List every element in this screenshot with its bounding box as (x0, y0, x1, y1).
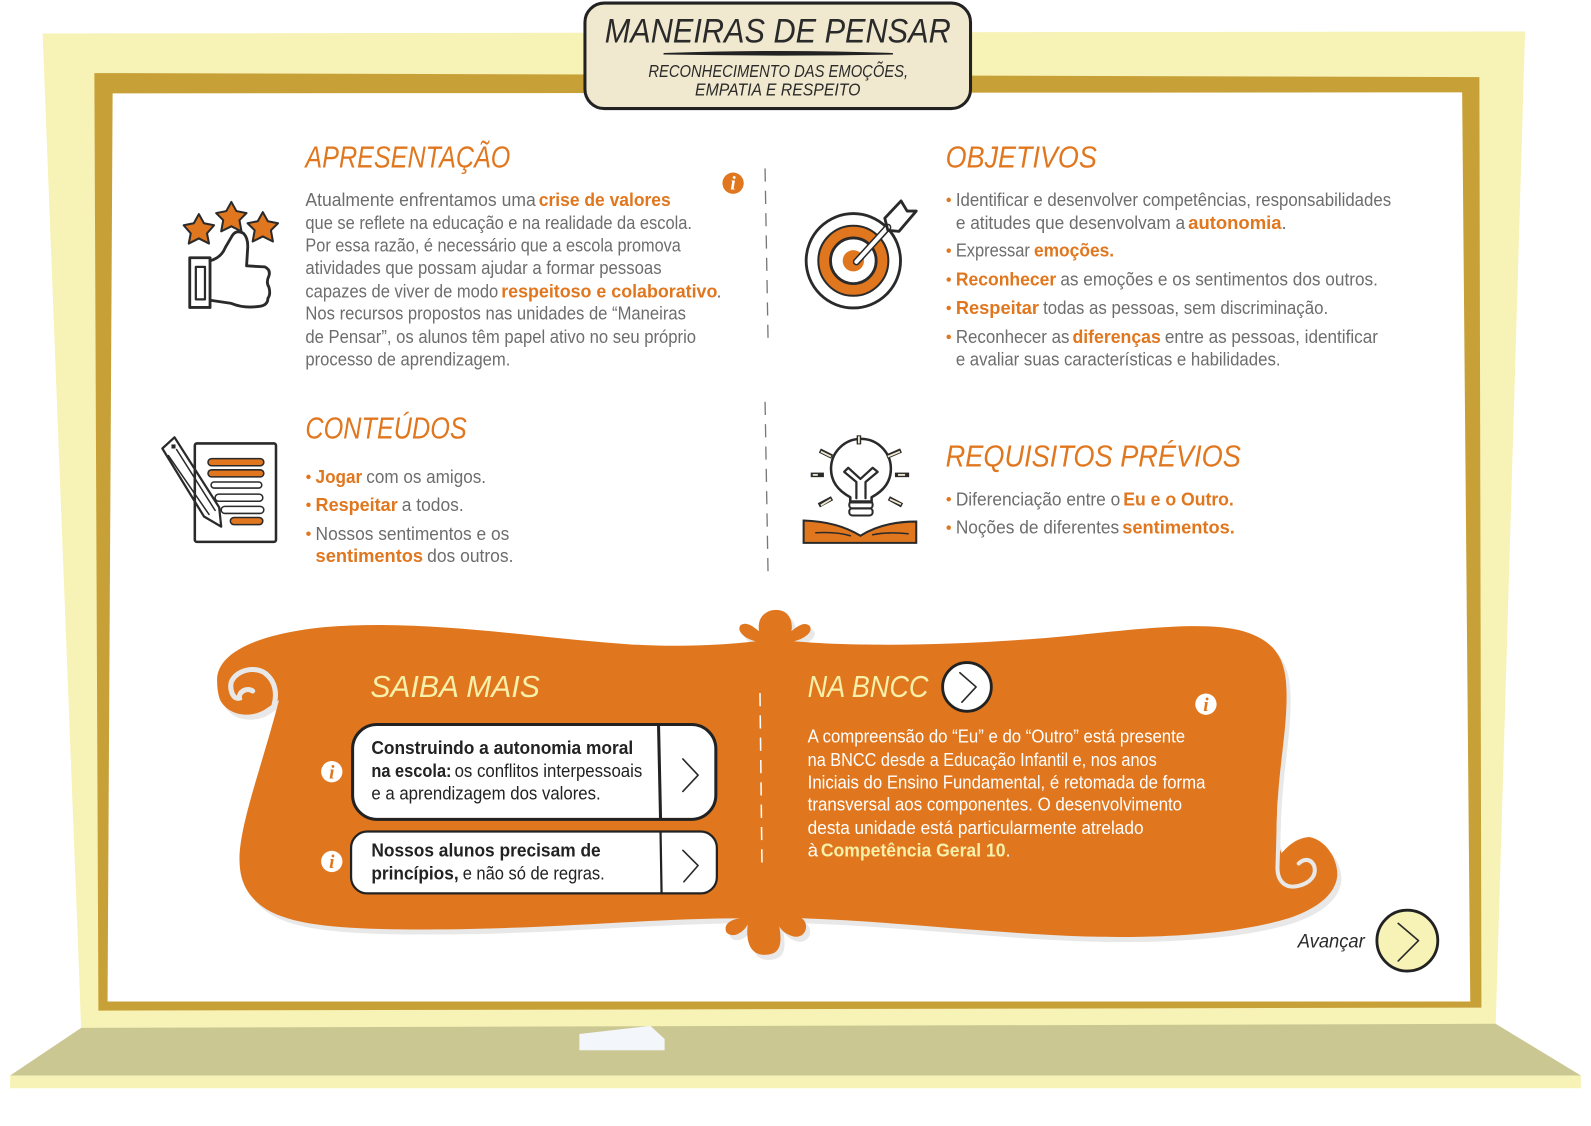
board: white writing surface (108, 92, 1470, 1001)
list: conteúdos: com os amigos. (366, 466, 486, 487)
icon: thumbs up with stars (184, 202, 278, 307)
list: objetivos: autonomia (1188, 212, 1282, 233)
title: MANEIRAS DE PENSAR (605, 13, 951, 51)
heading: apresentação: APRESENTAÇÃO (304, 139, 510, 174)
left spiral (231, 670, 275, 705)
text block: na bncc: à (808, 839, 819, 860)
list: objetivos: Reconhecer (956, 269, 1057, 290)
list: requisitos: Noções de diferentes (956, 517, 1119, 538)
list: objetivos: todas as pessoas, sem discriminação. (1043, 297, 1328, 318)
text block: apresentação: capazes de viver de modo (305, 280, 498, 301)
icon: target with arrow (806, 201, 916, 308)
card: alunos e princípios: e não só de regras. (463, 863, 605, 884)
text block: apresentação: . (716, 280, 722, 301)
card: alunos e princípios: Nossos alunos precisam de (371, 839, 601, 860)
text block: apresentação: Atualmente enfrentamos uma (305, 189, 536, 210)
list: objetivos: emoções. (1034, 240, 1114, 261)
icon: info orange: i (730, 174, 736, 195)
list: objetivos: diferenças (1073, 326, 1161, 347)
list: objetivos: e atitudes que desenvolvam a (956, 212, 1186, 233)
text block: na bncc: transversal aos componentes. O desenvolvimento (808, 794, 1182, 815)
list: objetivos: as emoções e os sentimentos dos outros. (1060, 269, 1378, 290)
text block: na bncc: na BNCC desde a Educação Infantil e, nos anos (808, 749, 1157, 770)
list: requisitos: sentimentos. (1122, 517, 1235, 538)
icon: light bulb over open book (804, 435, 916, 543)
text block: apresentação: de Pensar”, os alunos têm papel ativo no seu próprio (305, 326, 696, 347)
card: autonomia moral: Construindo a autonomia moral (371, 737, 633, 758)
heading: saiba mais: SAIBA MAIS (370, 670, 540, 704)
list: requisitos (946, 488, 1235, 538)
list: conteúdos: a todos. (402, 494, 464, 515)
chalk eraser (579, 1026, 665, 1050)
text block: na bncc: A compreensão do “Eu” e do “Outro” está presente (808, 726, 1185, 747)
subtitle (648, 61, 908, 99)
list: objetivos: Identificar e desenvolver competências, responsabilidades (956, 189, 1391, 210)
board: tray front edge (10, 1076, 1581, 1088)
title plaque (585, 3, 971, 109)
list: objetivos: e avaliar suas características e habilidades. (956, 348, 1281, 369)
heading: na bncc: NA BNCC (808, 670, 929, 704)
card: autonomia moral: e a aprendizagem dos valores. (371, 783, 601, 804)
list: objetivos: Respeitar (956, 297, 1040, 318)
list: conteúdos (306, 466, 513, 566)
board: tray top (10, 1024, 1581, 1076)
list: requisitos: Eu e o Outro. (1123, 488, 1234, 509)
text block: na bncc: . (1006, 839, 1011, 860)
list: objetivos: Expressar (956, 240, 1030, 261)
board: gold frame (94, 73, 1481, 1011)
icon: info card 1 (321, 761, 342, 783)
list: conteúdos: Nossos sentimentos e os (316, 523, 509, 544)
card: alunos e princípios (351, 832, 717, 893)
text block: na bncc (808, 726, 1206, 860)
icon: info orange (722, 173, 744, 195)
section divider lower (765, 402, 768, 576)
heading: objetivos: OBJETIVOS (946, 140, 1097, 174)
list: conteúdos: Respeitar (316, 494, 398, 515)
list: conteúdos: dos outros. (427, 545, 513, 566)
heading: requisitos prévios: REQUISITOS PRÉVIOS (946, 439, 1241, 474)
text block: apresentação: atividades que possam ajudar a formar pessoas (305, 257, 662, 278)
text block: apresentação: processo de aprendizagem. (305, 348, 510, 369)
panel: orange scroll (217, 610, 1337, 955)
scroll shadow (221, 615, 1341, 960)
list: conteúdos: Jogar (316, 466, 363, 487)
icon: document and pencil (162, 437, 276, 542)
text block: apresentação: Por essa razão, é necessário que a escola promova (305, 235, 681, 256)
text block: apresentação: que se reflete na educação e na realidade da escola. (305, 212, 692, 233)
button: na bncc arrow (943, 663, 991, 711)
text block: na bncc: desta unidade está particularmente atrelado (808, 817, 1144, 838)
icon: info card 2: i (329, 852, 335, 873)
panel: requisitos prévios (946, 439, 1241, 538)
subtitle: RECONHECIMENTO DAS EMOÇÕES, (648, 61, 908, 81)
list: objetivos: . (1282, 212, 1287, 233)
scroll centre stitching (760, 693, 762, 868)
card: autonomia moral: na escola: (371, 760, 452, 781)
text block: apresentação: respeitoso e colaborativo (501, 280, 717, 301)
list: objetivos: entre as pessoas, identificar (1165, 326, 1378, 347)
card: autonomia moral: os conflitos interpessoais (455, 760, 642, 781)
subtitle: EMPATIA E RESPEITO (695, 79, 860, 99)
heading: conteúdos: CONTEÚDOS (305, 410, 467, 445)
list: objetivos: Reconhecer as (956, 326, 1069, 347)
icon: info bncc (1195, 694, 1217, 716)
panel: objetivos (946, 140, 1391, 369)
list: conteúdos: sentimentos (316, 545, 423, 566)
text block: apresentação (305, 189, 722, 369)
icon: info bncc: i (1203, 695, 1209, 716)
icon: info card 1: i (329, 762, 335, 783)
text block: na bncc: Competência Geral 10 (821, 839, 1006, 860)
card: autonomia moral (353, 724, 716, 819)
icon: info card 2 (321, 851, 342, 873)
next button label: Avançar (1297, 932, 1366, 953)
text block: apresentação: crise de valores (539, 189, 671, 210)
card: alunos e princípios: princípios, (371, 863, 459, 884)
next button (1377, 910, 1438, 971)
list: requisitos: Diferenciação entre o (956, 488, 1120, 509)
section divider upper (765, 168, 768, 343)
panel: apresentação (304, 139, 722, 369)
list: objetivos (946, 189, 1391, 369)
right spiral (1277, 802, 1315, 887)
text block: na bncc: Iniciais do Ensino Fundamental, é retomada de forma (808, 771, 1206, 792)
text block: apresentação: Nos recursos propostos nas unidades de “Maneiras (305, 303, 686, 324)
panel: conteúdos (305, 410, 513, 566)
